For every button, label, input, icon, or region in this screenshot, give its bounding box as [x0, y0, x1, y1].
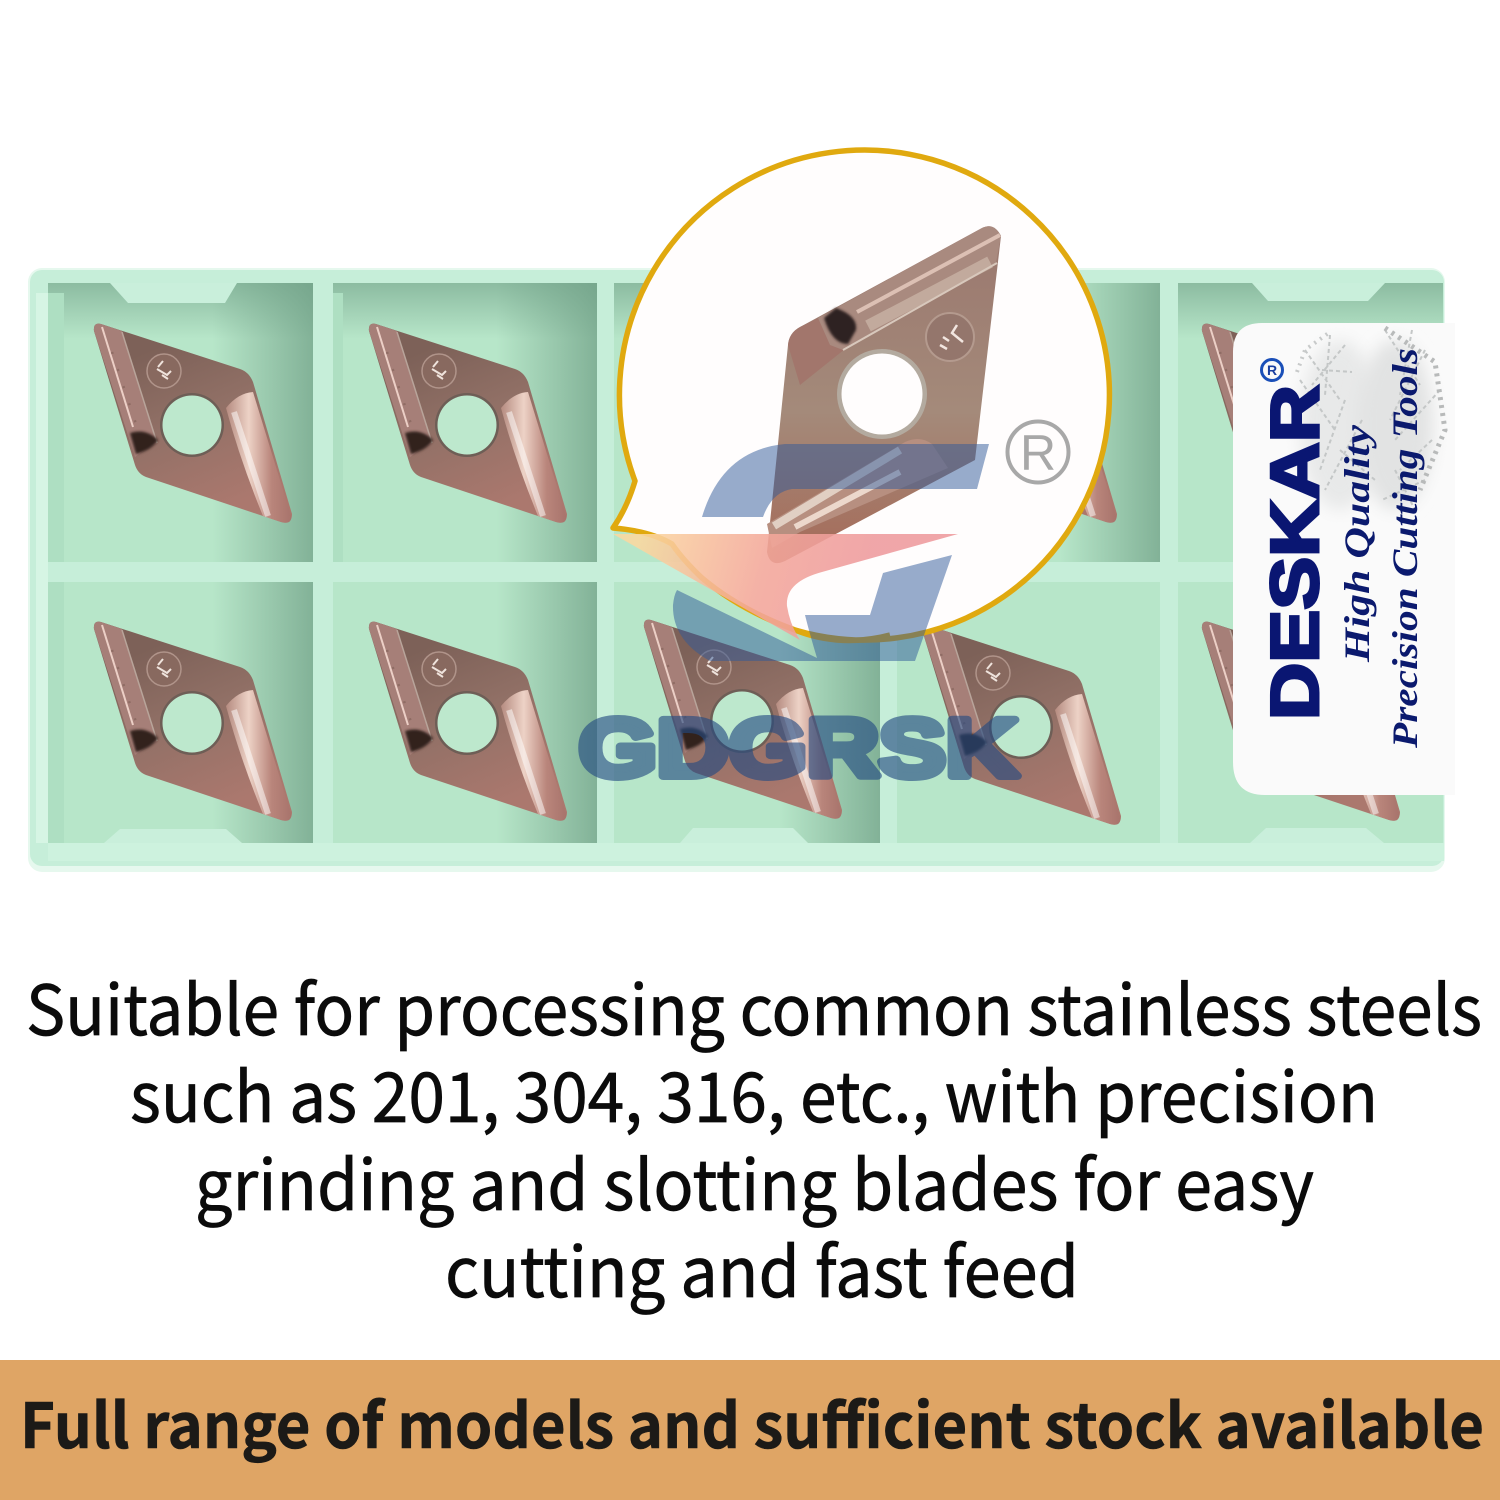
- watermark: GDGRSK logo mark: [613, 444, 989, 661]
- tray cell: row 1 column 2: [333, 283, 597, 562]
- tray locking tabs: [104, 283, 1385, 843]
- description line 3: grinding and slotting blades for easy: [195, 1130, 1314, 1230]
- tray cell: row 2 column 1: [48, 582, 313, 843]
- registered mark on label: R: [1267, 362, 1277, 378]
- tagline: Precision Cutting Tools: Precision Cutting Tools: [1385, 348, 1425, 749]
- watermark: GDGRSK wordmark: GDGRSK: [579, 703, 1018, 794]
- logo top blue bar: [702, 444, 989, 517]
- inserts: row 1 column 5: [1202, 324, 1400, 523]
- logo lower blue shapes: [673, 555, 952, 661]
- watermark: registered mark: R: [1020, 425, 1056, 481]
- inserts: row 1 column 1: [94, 324, 292, 523]
- inserts: row 1 column 2: [369, 324, 567, 523]
- tray cell: row 1 column 4: [897, 283, 1160, 562]
- inserts: row 1 column 4: [919, 324, 1117, 523]
- description line 2: such as 201, 304, 316, etc., with precision: [130, 1042, 1378, 1142]
- brand wordmark: DESKAR: DESKAR: [1257, 385, 1333, 720]
- label snowflake pattern: [1297, 328, 1445, 510]
- inserts: row 2 column 5: [1202, 622, 1400, 821]
- tray cell: row 1 column 5: [1178, 283, 1443, 562]
- inserts: row 2 column 2: [369, 622, 567, 821]
- registered mark on label: [1262, 360, 1282, 380]
- banner text: Full range of models and sufficient stock available: [20, 1376, 1484, 1466]
- bottom banner: [0, 1360, 1500, 1500]
- tray cell: row 2 column 4: [897, 582, 1160, 843]
- tray cell: row 1 column 1: [48, 283, 313, 562]
- inserts: row 2 column 4: [923, 626, 1121, 825]
- magnifier callout bubble: [613, 150, 1109, 640]
- description text: [26, 955, 1482, 1317]
- panel: green insert tray: [28, 268, 1445, 872]
- product label card: [1233, 323, 1455, 795]
- tagline: High Quality: High Quality: [1337, 424, 1377, 663]
- tray cell: row 2 column 5: [1178, 582, 1443, 843]
- tray cell: row 2 column 2: [333, 582, 597, 843]
- watermark: registered mark: [1008, 422, 1068, 482]
- enlarged insert: [767, 226, 1001, 563]
- description line 4: cutting and fast feed: [445, 1217, 1079, 1317]
- inserts: row 2 column 3: [644, 620, 842, 819]
- tray cell: row 1 column 3: [614, 283, 880, 562]
- inserts: row 2 column 1: [94, 622, 292, 821]
- logo orange-red swoosh: [613, 534, 958, 640]
- tray cell: row 2 column 3: [614, 582, 880, 843]
